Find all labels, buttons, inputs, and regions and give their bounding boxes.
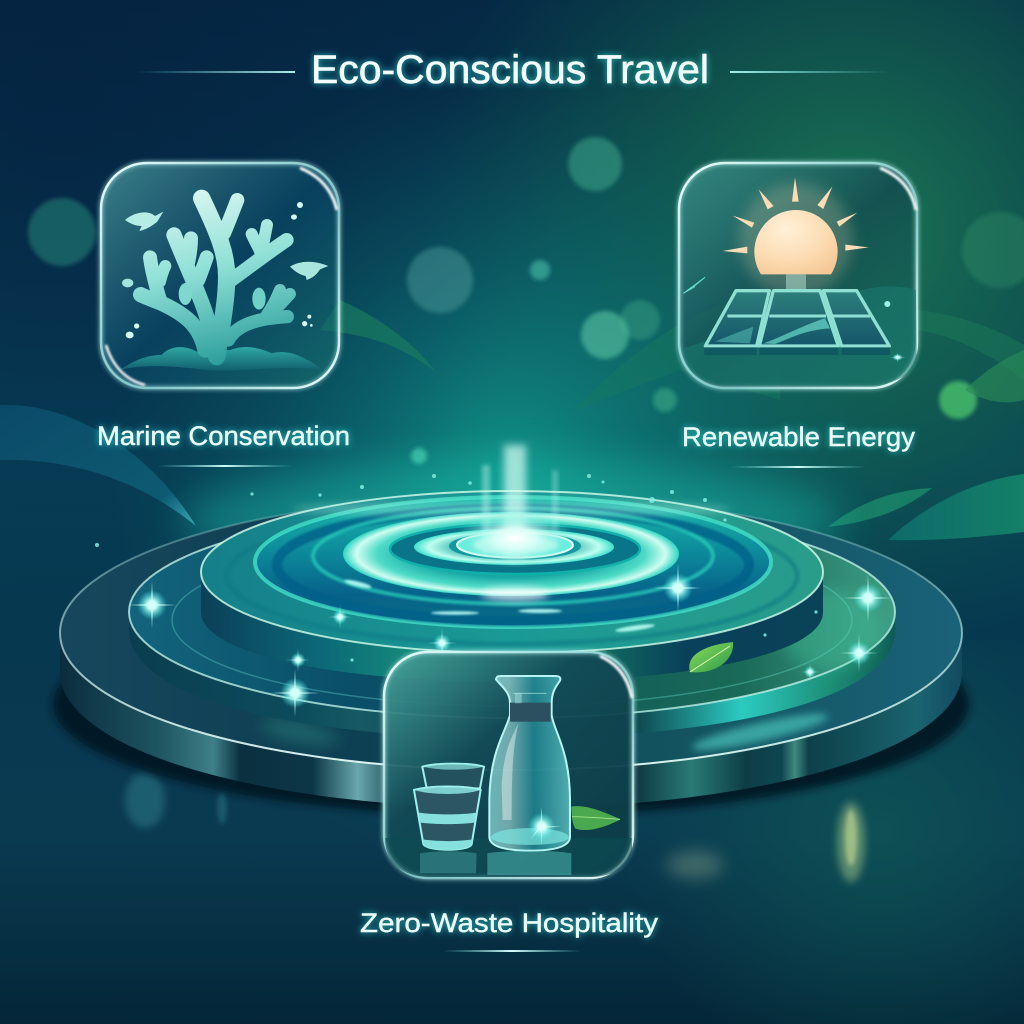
background leaves	[0, 290, 1024, 540]
water ripples	[255, 497, 771, 633]
icon: sun	[723, 177, 869, 297]
middle plate	[129, 506, 895, 738]
panel: marine conservation	[101, 163, 339, 388]
icon: fish	[290, 262, 328, 280]
icon: glass carafe	[487, 676, 571, 875]
floor shadow	[53, 592, 969, 816]
label: zero-waste hospitality: Zero-Waste Hospitality	[360, 908, 659, 938]
icon: fish	[125, 212, 163, 231]
top plate	[201, 491, 823, 682]
floor reflections	[125, 772, 865, 882]
title: Eco-Conscious Travel	[311, 48, 709, 92]
central platform	[53, 445, 969, 882]
sparkles	[128, 564, 892, 717]
icon: floating leaf	[689, 642, 733, 672]
icon: cups	[414, 764, 484, 873]
light beam	[455, 445, 575, 601]
glow behind platform	[182, 460, 842, 580]
panel: zero-waste hospitality	[384, 652, 633, 878]
particles	[95, 474, 818, 662]
bokeh lights	[28, 137, 1024, 464]
icon: leaf	[571, 806, 621, 830]
bottom plate	[60, 496, 962, 808]
label: marine conservation: Marine Conservation	[97, 421, 350, 451]
icon: solar panels	[705, 291, 889, 346]
label: renewable energy: Renewable Energy	[682, 422, 915, 452]
panel: renewable energy	[679, 163, 917, 388]
icon: coral	[120, 198, 328, 371]
